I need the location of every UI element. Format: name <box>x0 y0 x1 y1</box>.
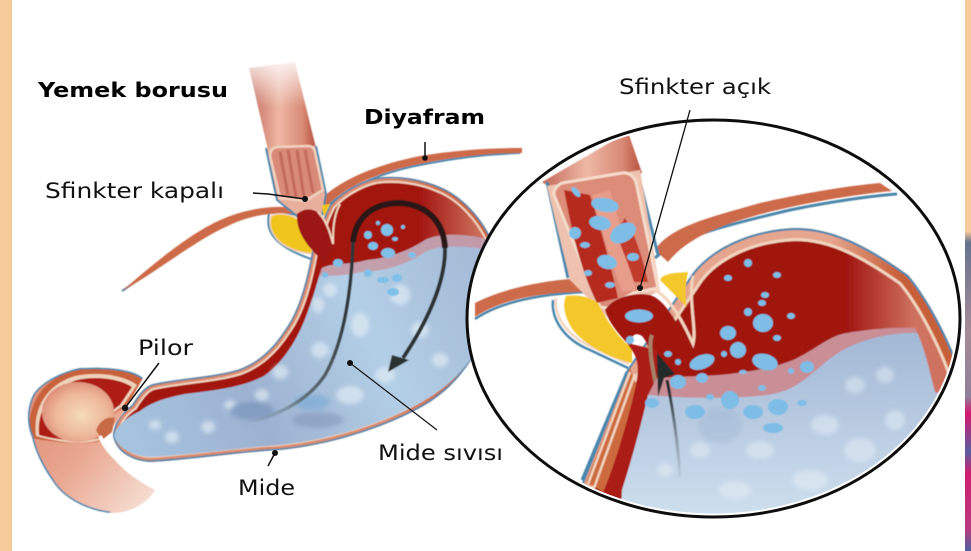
esophagus closed section <box>266 146 326 216</box>
close-up fluid <box>620 327 938 514</box>
close-up yellow fat <box>553 272 688 368</box>
label: Diyafram <box>364 105 485 161</box>
label: Pilor <box>122 336 193 411</box>
close-up lower-left wall <box>582 368 642 497</box>
close-up arrow: reflux <box>657 353 680 477</box>
close-up stomach wall <box>582 227 953 499</box>
label: Mide sıvısı <box>347 360 503 465</box>
label: Pilor: Pilor <box>138 336 193 360</box>
fluid mottling <box>149 283 448 443</box>
label: Mide: Mide <box>238 476 295 500</box>
label: Sfinkter kapalı: Sfinkter kapalı <box>45 179 224 203</box>
yellow fat <box>268 203 339 260</box>
arrow: fluid circulation <box>240 202 445 424</box>
stomach body wall <box>113 177 500 462</box>
illustration: stomach with closed sphincter <box>113 55 522 462</box>
label: Sfinkter kapalı <box>45 179 308 203</box>
esophagus upper tube <box>245 55 318 150</box>
closed sphincter <box>297 204 340 264</box>
diaphragm left <box>122 207 297 291</box>
close-up diaphragm right <box>655 183 897 262</box>
label: Sfinkter açık: Sfinkter açık <box>619 75 772 99</box>
close-up open sphincter <box>602 276 700 497</box>
label: Mide sıvısı: Mide sıvısı <box>378 441 503 465</box>
acid droplets <box>322 221 416 296</box>
close-up acid droplets <box>569 185 814 433</box>
label: Mide <box>238 450 295 500</box>
close-up fluid mottling <box>657 367 905 499</box>
close-up esophagus <box>542 132 660 320</box>
illustration: pylorus and duodenum <box>28 368 155 513</box>
close-up diaphragm left <box>475 278 585 319</box>
stomach fluid <box>114 235 500 457</box>
label: Diyafram: Diyafram <box>364 105 485 129</box>
label: Yemek borusu: Yemek borusu <box>37 78 228 102</box>
circle outline <box>467 120 960 517</box>
label: Sfinkter açık <box>619 75 772 291</box>
diaphragm right <box>320 148 522 209</box>
illustration: zoom circle with open sphincter <box>467 120 960 530</box>
